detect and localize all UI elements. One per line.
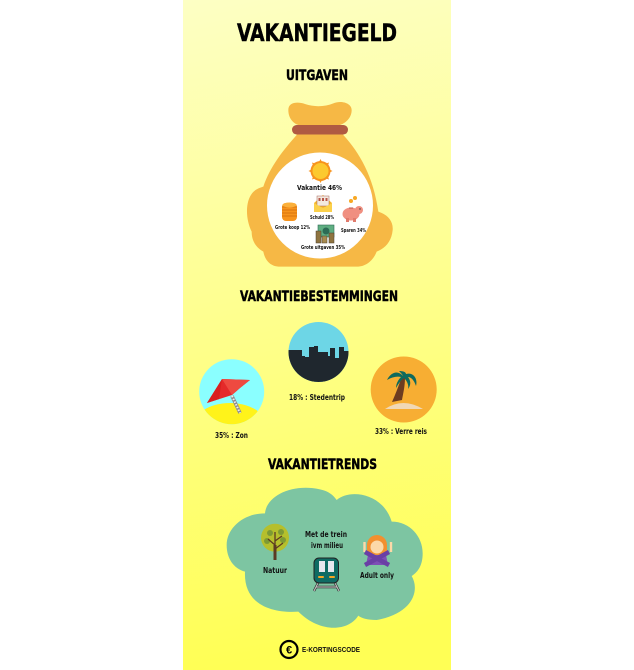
destination: verre reis <box>371 356 437 436</box>
title: VAKANTIEGELD <box>237 19 397 47</box>
icon: tree <box>261 524 289 560</box>
destination: zon <box>199 359 264 438</box>
label: ivm milieu: ivm milieu <box>311 541 343 550</box>
icon: palm island <box>371 356 437 422</box>
heading: vakantiebestemmingen: VAKANTIEBESTEMMINGEN <box>240 289 398 305</box>
icon: sun <box>308 159 332 183</box>
money bag panel <box>247 102 393 267</box>
icon: piggy bank <box>342 196 363 222</box>
icon: beach umbrella <box>199 359 264 424</box>
label: vakantie: Vakantie 46% <box>297 184 342 192</box>
icon: person crossing arms <box>364 535 391 565</box>
background panel <box>183 0 451 670</box>
bag body <box>247 102 393 267</box>
label: schuld: Schuld 28% <box>310 215 334 221</box>
icon: coins <box>282 202 297 221</box>
label: grote uitgaven: Grote uitgaven 35% <box>301 245 345 251</box>
icon: money stack <box>316 225 334 243</box>
trends cloud panel <box>227 488 423 628</box>
label: met de trein: Met de trein <box>305 530 347 539</box>
icon: city skyline <box>288 322 349 383</box>
heading: uitgaven: UITGAVEN <box>286 68 348 84</box>
cloud shape <box>227 488 423 628</box>
label: stedentrip: 18% : Stedentrip <box>289 393 345 402</box>
infographic <box>183 0 451 670</box>
icon: envelope <box>314 195 332 212</box>
logo: e-kortingscode <box>280 641 360 658</box>
label: zon: 35% : Zon <box>215 431 248 440</box>
destination: stedentrip <box>288 322 349 402</box>
white circle <box>267 152 373 258</box>
label: verre reis: 33% : Verre reis <box>375 427 427 436</box>
label: adult only: Adult only <box>360 571 394 580</box>
logo text: E-KORTINGSCODE <box>302 647 360 654</box>
heading: vakantietrends: VAKANTIETRENDS <box>268 457 377 473</box>
icon: euro circle: € <box>286 644 292 656</box>
label: sparen: Sparen 34% <box>341 228 366 234</box>
label: grote koop: Grote koop 12% <box>275 225 310 231</box>
icon: train <box>314 558 339 591</box>
label: natuur: Natuur <box>263 566 287 575</box>
bag band <box>292 125 348 134</box>
